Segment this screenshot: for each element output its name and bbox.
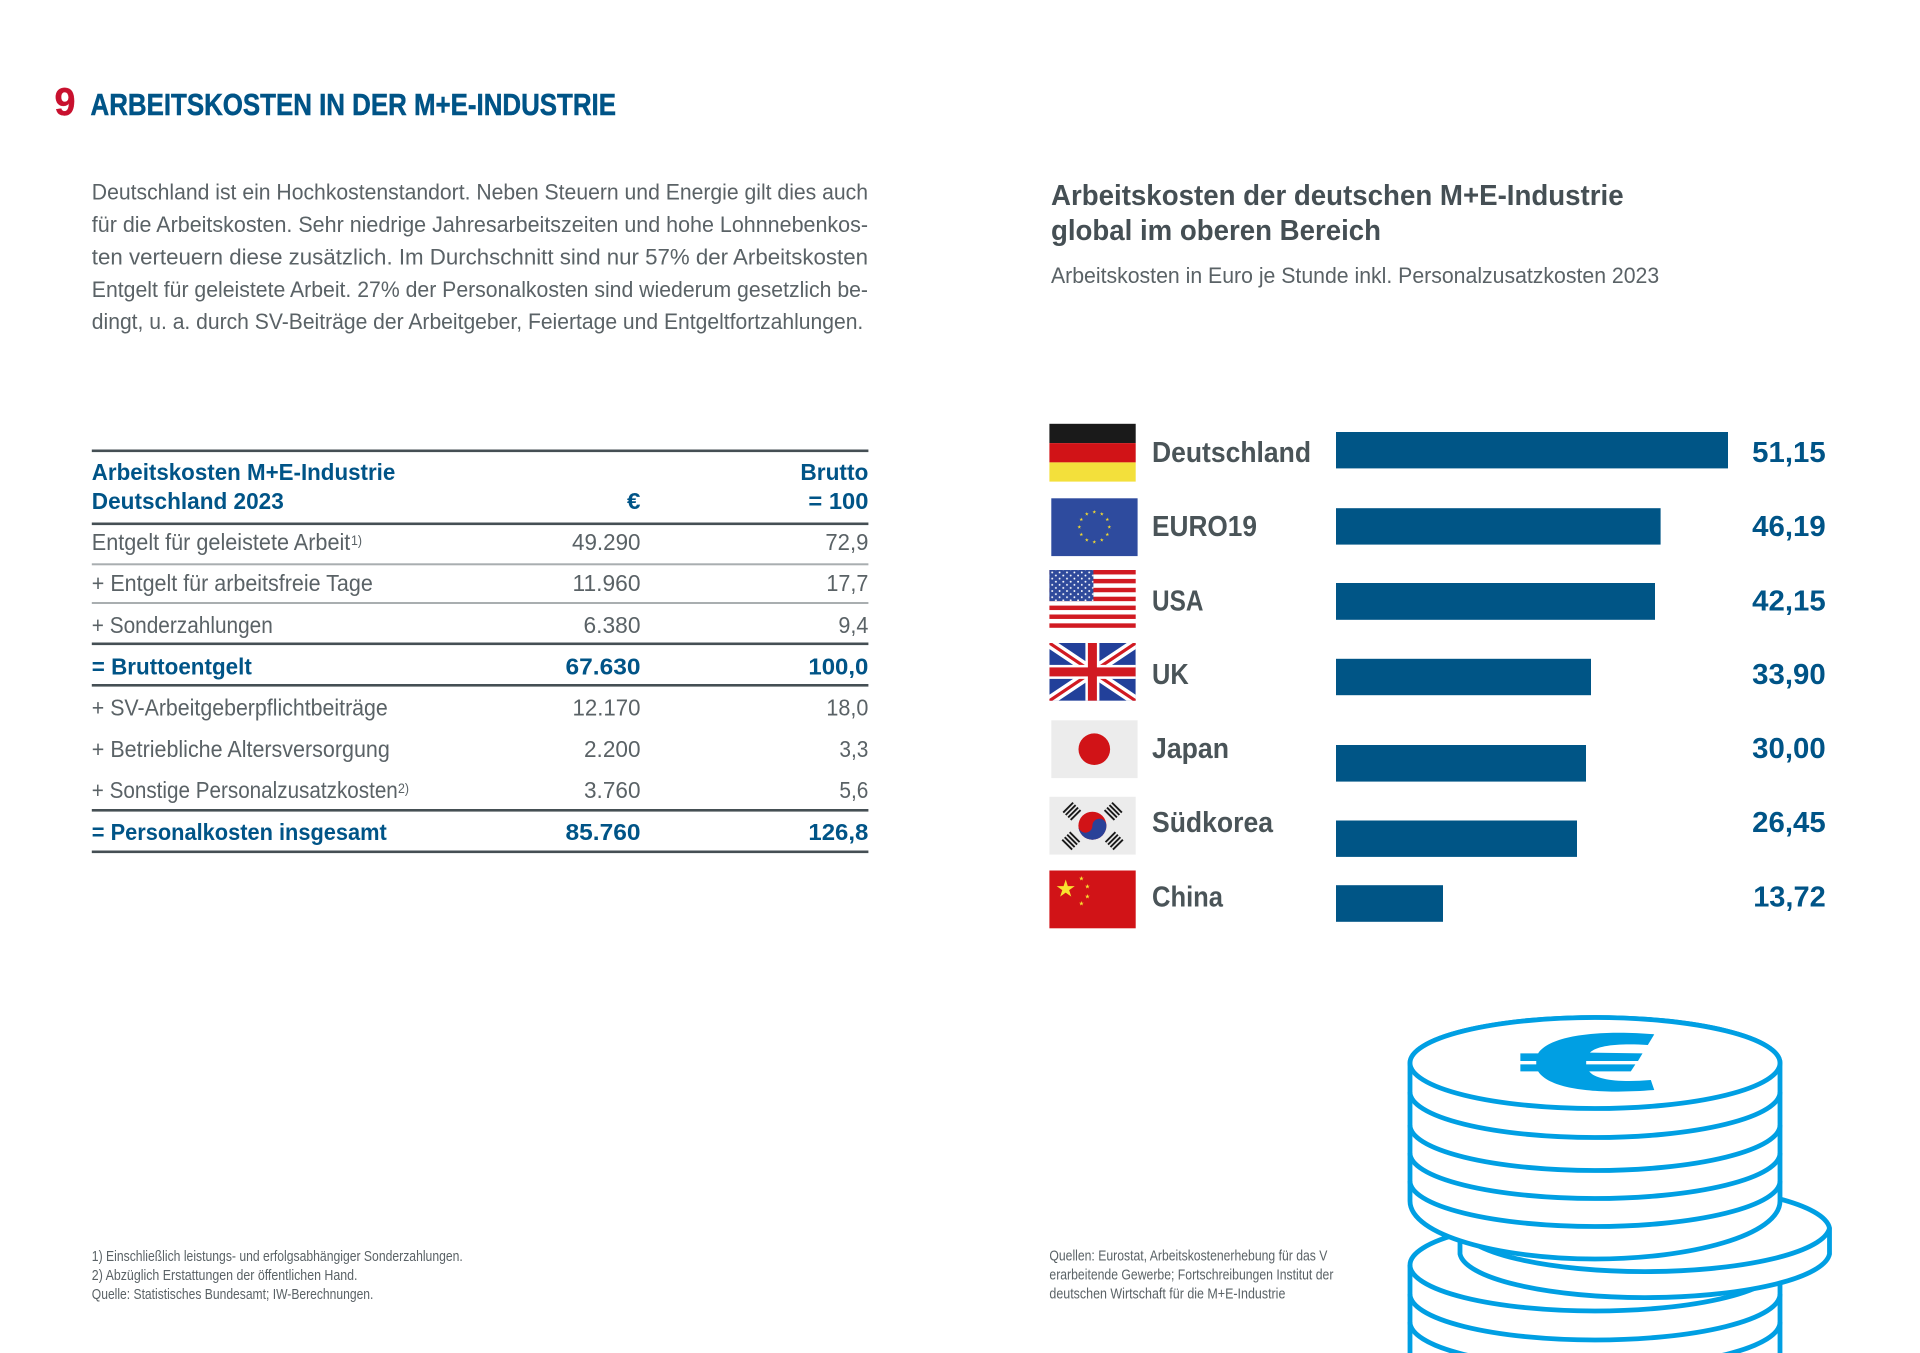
coin stack top — [1410, 1018, 1780, 1259]
row: Japan: 30,00 — [1752, 733, 1826, 765]
icon: flag Germany — [1049, 424, 1136, 482]
row: Bruttoentgelt total: = Bruttoentgelt — [92, 653, 252, 679]
intro text block: dingt, u. a. durch SV-Beiträge der Arbeitgeber, Feiertage und Entgeltfortzahlungen. — [92, 309, 863, 334]
row: Japan — [1051, 720, 1826, 782]
table header: Brutto — [800, 459, 868, 485]
row: UK: UK — [1152, 659, 1189, 691]
intro text block: für die Arbeitskosten. Sehr niedrige Jahresarbeitszeiten und hohe Lohnnebenkos- — [92, 212, 868, 237]
row: Entgelt für arbeitsfreie Tage — [92, 570, 868, 596]
bar chart: labour costs per hour — [1049, 424, 1826, 928]
row: China — [1049, 870, 1826, 928]
row: Bruttoentgelt total — [92, 653, 868, 679]
table: Arbeitskosten M+E-Industrie Deutschland 2023 — [92, 450, 869, 853]
footnote sources right: deutschen Wirtschaft für die M+E-Industrie — [1049, 1286, 1285, 1302]
row: Entgelt für arbeitsfreie Tage: 11.960 — [572, 570, 640, 596]
row: Sonstige Personalzusatzkosten: 2) — [398, 780, 409, 796]
row: Entgelt für geleistete Arbeit: 1) — [351, 532, 362, 548]
footnotes left: 1) Einschließlich leistungs- und erfolgsabhängiger Sonderzahlungen. — [92, 1248, 463, 1265]
intro text block: ten verteuern diese zusätzlich. Im Durchschnitt sind nur 57% der Arbeitskosten — [92, 244, 868, 269]
row: SV-Arbeitgeberpflichtbeiträge: + SV-Arbeitgeberpflichtbeiträge — [92, 694, 388, 720]
footnotes left: 2) Abzüglich Erstattungen der öffentlichen Hand. — [92, 1267, 358, 1284]
icon: stack of euro coins — [1410, 1018, 1830, 1353]
row: Deutschland: 51,15 — [1752, 437, 1826, 469]
row: China: 13,72 — [1753, 881, 1826, 913]
row: SV-Arbeitgeberpflichtbeiträge: 18,0 — [826, 694, 868, 720]
row: Bruttoentgelt total: 100,0 — [808, 653, 868, 679]
section title: ARBEITSKOSTEN IN DER M+E-INDUSTRIE — [90, 88, 616, 122]
section number: 9 — [54, 81, 76, 124]
row: Südkorea: 26,45 — [1752, 807, 1826, 839]
icon: flag UK — [1049, 643, 1136, 701]
row: UK: 33,90 — [1752, 659, 1826, 691]
chart heading: global im oberen Bereich — [1051, 215, 1381, 247]
row: Personalkosten insgesamt total: 85.760 — [566, 819, 640, 845]
row: Sonderzahlungen: 6.380 — [584, 612, 640, 638]
row: USA — [1049, 570, 1826, 628]
row: Südkorea: Südkorea — [1152, 807, 1274, 839]
footnotes left: Quelle: Statistisches Bundesamt; IW-Berechnungen. — [92, 1286, 373, 1303]
table header: Arbeitskosten M+E-Industrie — [92, 459, 395, 485]
table header: Deutschland 2023 — [92, 488, 284, 514]
row: Betriebliche Altersversorgung: 2.200 — [584, 736, 640, 762]
intro text block: Entgelt für geleistete Arbeit. 27% der Personalkosten sind wiederum gesetzlich be- — [92, 277, 868, 302]
row: Sonstige Personalzusatzkosten: 5,6 — [839, 777, 868, 803]
row: UK — [1049, 643, 1826, 701]
coin stack bottom — [1410, 1219, 1780, 1353]
footnote sources right: erarbeitende Gewerbe; Fortschreibungen Institut der — [1049, 1266, 1333, 1284]
table header — [92, 459, 868, 514]
coin middle offset — [1460, 1184, 1830, 1298]
footnote sources right — [1049, 1248, 1333, 1302]
row: Südkorea — [1049, 797, 1826, 857]
row: Betriebliche Altersversorgung — [92, 736, 868, 762]
footnotes left — [92, 1248, 463, 1303]
table header: € — [627, 488, 640, 514]
icon: flag EU — [1051, 498, 1138, 556]
row: USA: USA — [1152, 585, 1203, 617]
row: Sonstige Personalzusatzkosten: + Sonstige Personalzusatzkosten — [92, 777, 398, 803]
icon: flag China — [1049, 870, 1136, 928]
row: Sonderzahlungen: + Sonderzahlungen — [92, 612, 273, 638]
chart heading: Arbeitskosten der deutschen M+E-Industrie — [1051, 180, 1624, 212]
chart subtitle: Arbeitskosten in Euro je Stunde inkl. Personalzusatzkosten 2023 — [1051, 263, 1659, 288]
row: Bruttoentgelt total: 67.630 — [566, 653, 640, 679]
row: Betriebliche Altersversorgung: + Betriebliche Altersversorgung — [92, 736, 390, 762]
icon: flag South Korea — [1049, 797, 1136, 855]
row: Entgelt für geleistete Arbeit: 72,9 — [825, 529, 868, 555]
row: EURO19: EURO19 — [1152, 511, 1257, 543]
row: Entgelt für arbeitsfreie Tage: 17,7 — [826, 570, 868, 596]
row: Personalkosten insgesamt total — [92, 819, 868, 845]
row: Deutschland: Deutschland — [1152, 437, 1311, 469]
row: EURO19: 46,19 — [1752, 511, 1826, 543]
footnote sources right: Quellen: Eurostat, Arbeitskostenerhebung für das V — [1049, 1248, 1327, 1264]
intro text block — [92, 180, 868, 334]
row: Sonstige Personalzusatzkosten: 3.760 — [584, 777, 640, 803]
row: Sonstige Personalzusatzkosten — [92, 777, 868, 803]
row: Sonderzahlungen: 9,4 — [838, 612, 869, 638]
row: Entgelt für arbeitsfreie Tage: + Entgelt für arbeitsfreie Tage — [92, 570, 373, 596]
row: Entgelt für geleistete Arbeit — [92, 529, 868, 555]
row: Deutschland — [1049, 424, 1826, 482]
row: China: China — [1152, 881, 1224, 913]
row: USA: 42,15 — [1752, 585, 1826, 617]
row: Personalkosten insgesamt total: = Personalkosten insgesamt — [92, 819, 387, 845]
table header: = 100 — [808, 488, 868, 514]
row: Personalkosten insgesamt total: 126,8 — [808, 819, 868, 845]
row: Japan: Japan — [1152, 733, 1229, 765]
row: Sonderzahlungen — [92, 612, 869, 638]
intro text block: Deutschland ist ein Hochkostenstandort. Neben Steuern und Energie gilt dies auch — [92, 180, 868, 205]
icon: euro symbol on coin — [1520, 1033, 1654, 1092]
icon: flag Japan — [1051, 720, 1138, 778]
row: SV-Arbeitgeberpflichtbeiträge: 12.170 — [572, 694, 640, 720]
chart heading — [1051, 180, 1624, 247]
row: Entgelt für geleistete Arbeit: Entgelt für geleistete Arbeit — [92, 529, 351, 555]
row: Entgelt für geleistete Arbeit: 49.290 — [572, 529, 640, 555]
row: SV-Arbeitgeberpflichtbeiträge — [92, 694, 868, 720]
row: EURO19 — [1051, 498, 1826, 556]
row: Betriebliche Altersversorgung: 3,3 — [839, 736, 868, 762]
icon: flag USA — [1049, 570, 1136, 628]
